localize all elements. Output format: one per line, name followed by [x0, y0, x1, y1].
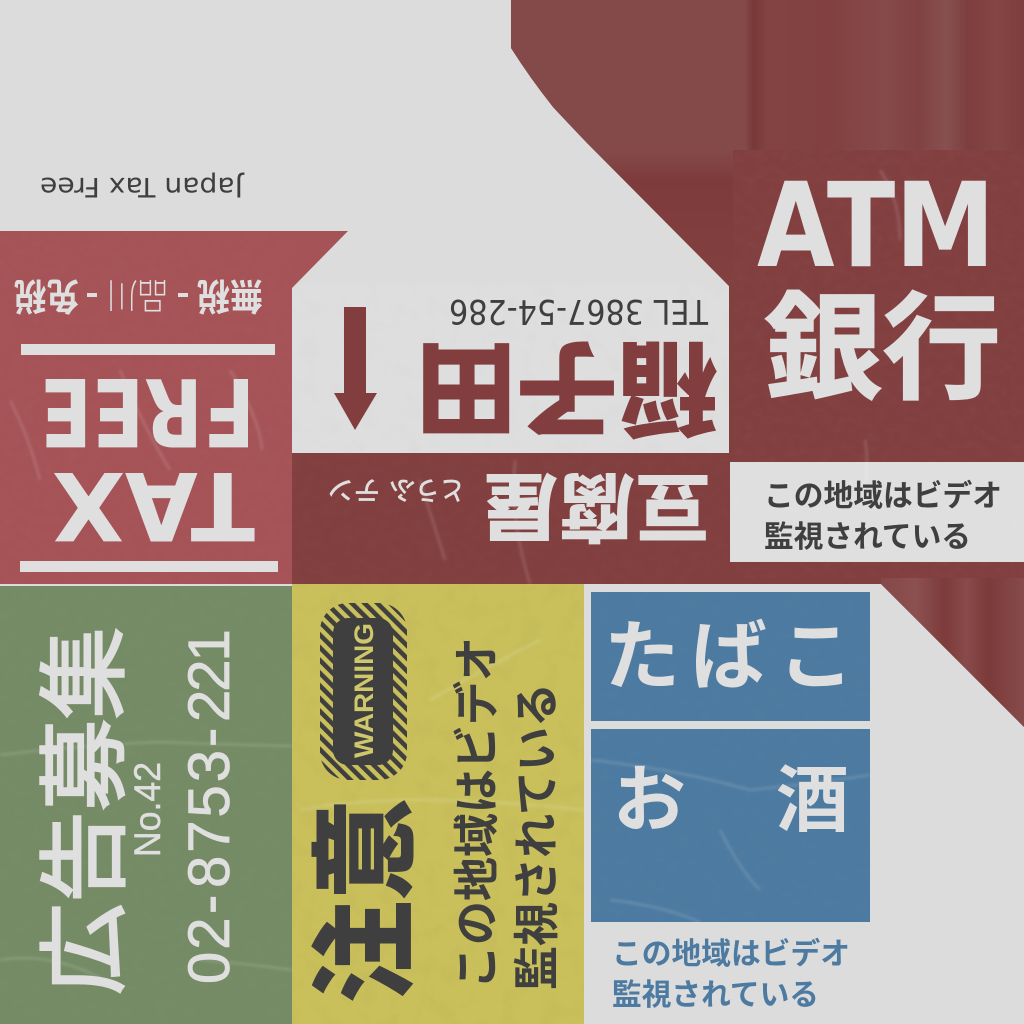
text block: tofu shop [328, 458, 711, 567]
text block: video notice grey: この地域はビデオ [764, 471, 1002, 515]
bottom rule [20, 561, 278, 572]
TAX: TAX [52, 450, 255, 559]
advert heading: 広告募集 [12, 627, 142, 995]
advert phone: 02 [177, 915, 242, 984]
tax free subtitle: 免税 [14, 272, 79, 326]
telephone number: TEL 3867-54-286 [449, 291, 709, 331]
text: alcohol: お [613, 741, 686, 847]
tofu shop name: 豆腐屋 [483, 458, 711, 567]
advert number: No.42 [127, 762, 168, 857]
tofu shop kana [328, 473, 465, 510]
tax free subtitle [14, 272, 263, 326]
text block: video notice yellow [441, 637, 567, 990]
panel: tofu shop white sign [292, 285, 729, 453]
bank: 銀行 [764, 255, 1001, 423]
advert phone: 8753 [177, 747, 242, 888]
tofu shop kana: テン [328, 473, 380, 510]
advert phone: 221 [177, 631, 242, 722]
text block: video notice blue [612, 929, 850, 1014]
text block: shop sign [334, 291, 718, 471]
text: alcohol [613, 741, 849, 847]
panel: yellow warning [292, 584, 584, 1024]
text: tobacco: たばこ [604, 595, 854, 705]
text block: video notice blue: この地域はビデオ [612, 929, 850, 973]
text block: video notice yellow: この地域はビデオ [441, 637, 507, 989]
heading: ATM bank [757, 157, 1001, 423]
tax free subtitle: 品川 [107, 272, 168, 324]
panel: tax free red [0, 231, 348, 584]
text block: video notice yellow: 監視されている [501, 683, 567, 990]
text block: video notice grey [764, 471, 1002, 556]
arrow: down [334, 307, 377, 430]
tax free subtitle: 無税 [197, 272, 263, 326]
text block: advert recruitment [12, 627, 242, 995]
text block: video notice grey: 監視されている [764, 512, 971, 556]
panel: blue alcohol sign [591, 729, 870, 922]
badge: warning [320, 603, 407, 780]
advert phone: - [177, 895, 242, 914]
heading: caution: 注意 [280, 798, 436, 1003]
shop name: 稲子田 [416, 322, 718, 471]
advert phone: - [177, 728, 242, 747]
panel: blue tobacco sign [591, 592, 870, 721]
top rule [21, 344, 275, 355]
heading: Japan Tax Free: Japan Tax Free [40, 171, 245, 202]
panel: dark red field [292, 0, 1024, 727]
text block: video notice blue: 監視されている [612, 970, 819, 1014]
text block: tax free panel [14, 272, 278, 572]
warning word: WARNING [349, 623, 379, 758]
text: alcohol: 酒 [776, 741, 849, 847]
tofu shop kana: とうふ [390, 473, 465, 510]
panel: video notice white box [730, 462, 1024, 562]
panel: green advert [0, 586, 292, 1024]
